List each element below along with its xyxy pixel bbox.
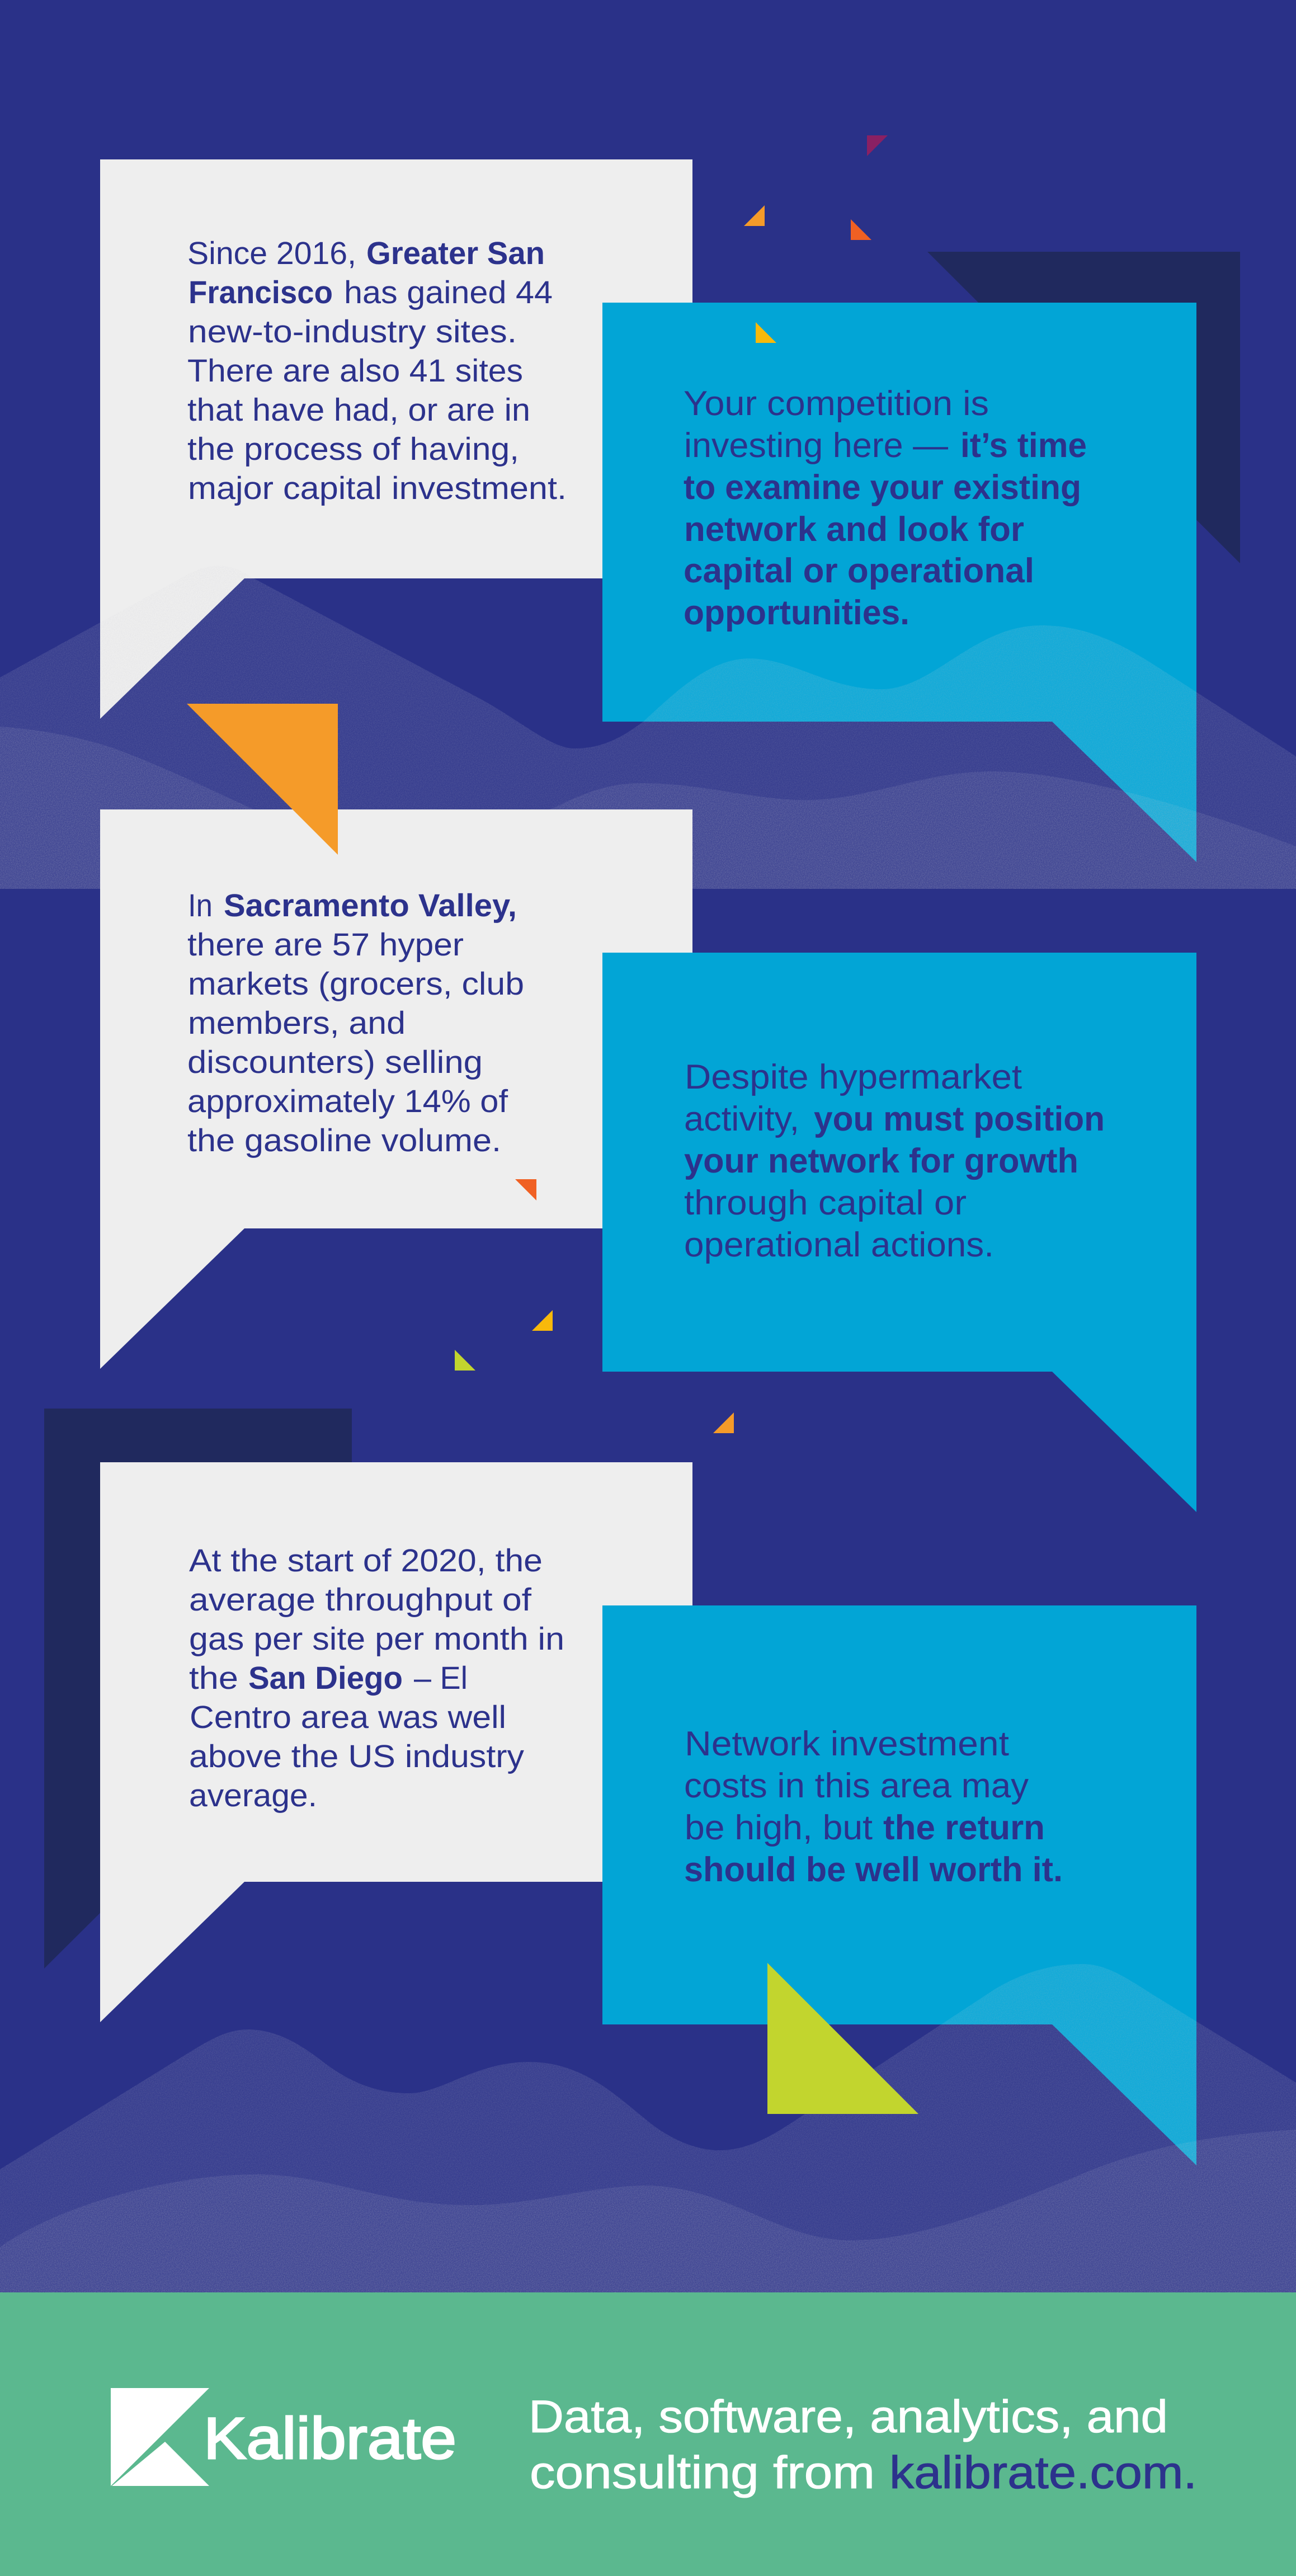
- text block: above the US industry: [189, 1739, 525, 1774]
- text block: [684, 1725, 1063, 1889]
- text block: network and look for: [684, 510, 1024, 549]
- text block: should be well worth it.: [684, 1850, 1063, 1889]
- large orange triangle: [187, 704, 338, 855]
- text block: there are 57 hyper: [187, 927, 464, 963]
- text block: [187, 888, 524, 1159]
- speech bubble: [100, 809, 692, 1369]
- text block: your network for growth: [684, 1142, 1078, 1180]
- text block: [684, 384, 1087, 632]
- logo: Kalibrate: [111, 2388, 456, 2486]
- dark shape behind third white panel: [44, 1409, 352, 1969]
- panel: Sacramento Valley: [100, 809, 692, 1369]
- text block: markets (grocers, club: [188, 966, 524, 1002]
- text block: major capital investment.: [188, 470, 567, 506]
- speech bubble: [602, 303, 1196, 862]
- text block: Francisco: [188, 275, 333, 310]
- text block: average throughput of: [189, 1582, 531, 1618]
- text block: new-to-industry sites.: [188, 314, 517, 350]
- accent triangle: orange: [713, 1412, 734, 1433]
- text block: the gasoline volume.: [187, 1123, 501, 1159]
- mountains: upper band back layer: [0, 566, 1296, 889]
- logo wordmark: Kalibrate: [204, 2406, 456, 2471]
- text block: through capital or: [684, 1184, 967, 1222]
- text block: the: [189, 1660, 238, 1696]
- speech bubble: [602, 953, 1196, 1512]
- text block: the return: [883, 1809, 1045, 1847]
- mountains: lower band back layer: [0, 1964, 1296, 2292]
- accent triangle: red-orange: [851, 219, 871, 240]
- accent triangle: orange: [744, 205, 765, 226]
- dark triangle behind first blue panel: [927, 252, 1240, 563]
- text block: has gained 44: [344, 275, 553, 310]
- accent triangle: yellow: [532, 1310, 553, 1331]
- text block: Greater San: [366, 236, 545, 271]
- text block: [684, 1058, 1105, 1264]
- large lime triangle: [767, 1963, 918, 2114]
- footer background: [0, 2292, 1296, 2576]
- text block: it’s time: [960, 426, 1087, 465]
- text block: Sacramento Valley,: [224, 888, 517, 924]
- panel: San Diego - El Centro: [100, 1462, 692, 2022]
- text block: to examine your existing: [684, 468, 1081, 507]
- text block: Centro area was well: [190, 1699, 506, 1735]
- text block: Your competition is: [684, 384, 989, 423]
- text block: costs in this area may: [684, 1767, 1029, 1805]
- speech bubble: [100, 1462, 692, 2022]
- text block: average.: [189, 1778, 317, 1814]
- speech bubble: [100, 159, 692, 719]
- logo mark upper triangle: [111, 2388, 209, 2486]
- text block: operational actions.: [684, 1226, 994, 1264]
- text block: the process of having,: [187, 431, 519, 467]
- panel: Greater San Francisco: [100, 159, 692, 719]
- accent triangle: yellow: [756, 322, 776, 343]
- text block: San Diego: [248, 1660, 403, 1696]
- tagline: consulting from: [530, 2447, 875, 2498]
- text block: investing here —: [684, 426, 948, 465]
- text block: capital or operational: [684, 552, 1034, 590]
- text block: you must position: [814, 1100, 1105, 1138]
- panel: the return: [602, 1605, 1196, 2165]
- text block: Network investment: [685, 1725, 1009, 1763]
- tagline: Data, software, analytics, and: [529, 2391, 1168, 2442]
- text block: [187, 236, 567, 506]
- tagline: [529, 2391, 1197, 2498]
- text block: approximately 14% of: [187, 1084, 508, 1119]
- logo mark lower triangle: [112, 2442, 209, 2486]
- text block: be high, but: [685, 1809, 873, 1847]
- mountains: upper band front layer: [0, 727, 1296, 889]
- text block: discounters) selling: [187, 1044, 483, 1080]
- panel: examine your network: [602, 303, 1196, 862]
- accent triangle: lime: [455, 1350, 475, 1371]
- text block: members, and: [188, 1005, 406, 1041]
- text block: that have had, or are in: [187, 392, 530, 428]
- mountains: lower band front layer: [0, 2130, 1296, 2292]
- text block: Despite hypermarket: [685, 1058, 1022, 1096]
- accent triangle: red-orange: [515, 1179, 536, 1200]
- text block: At the start of 2020, the: [189, 1543, 543, 1579]
- text block: There are also 41 sites: [187, 353, 523, 389]
- text block: gas per site per month in: [189, 1621, 564, 1657]
- text block: opportunities.: [684, 594, 909, 632]
- accent triangle: purple: [867, 135, 888, 156]
- tagline: kalibrate.com.: [889, 2447, 1197, 2498]
- panel: position your network: [602, 953, 1196, 1512]
- text block: activity,: [684, 1100, 799, 1138]
- speech bubble: [602, 1605, 1196, 2165]
- text block: Since 2016,: [187, 236, 356, 271]
- footer band: [0, 2292, 1296, 2576]
- text block: – El: [414, 1660, 468, 1696]
- text block: [189, 1543, 564, 1814]
- text block: In: [188, 888, 213, 924]
